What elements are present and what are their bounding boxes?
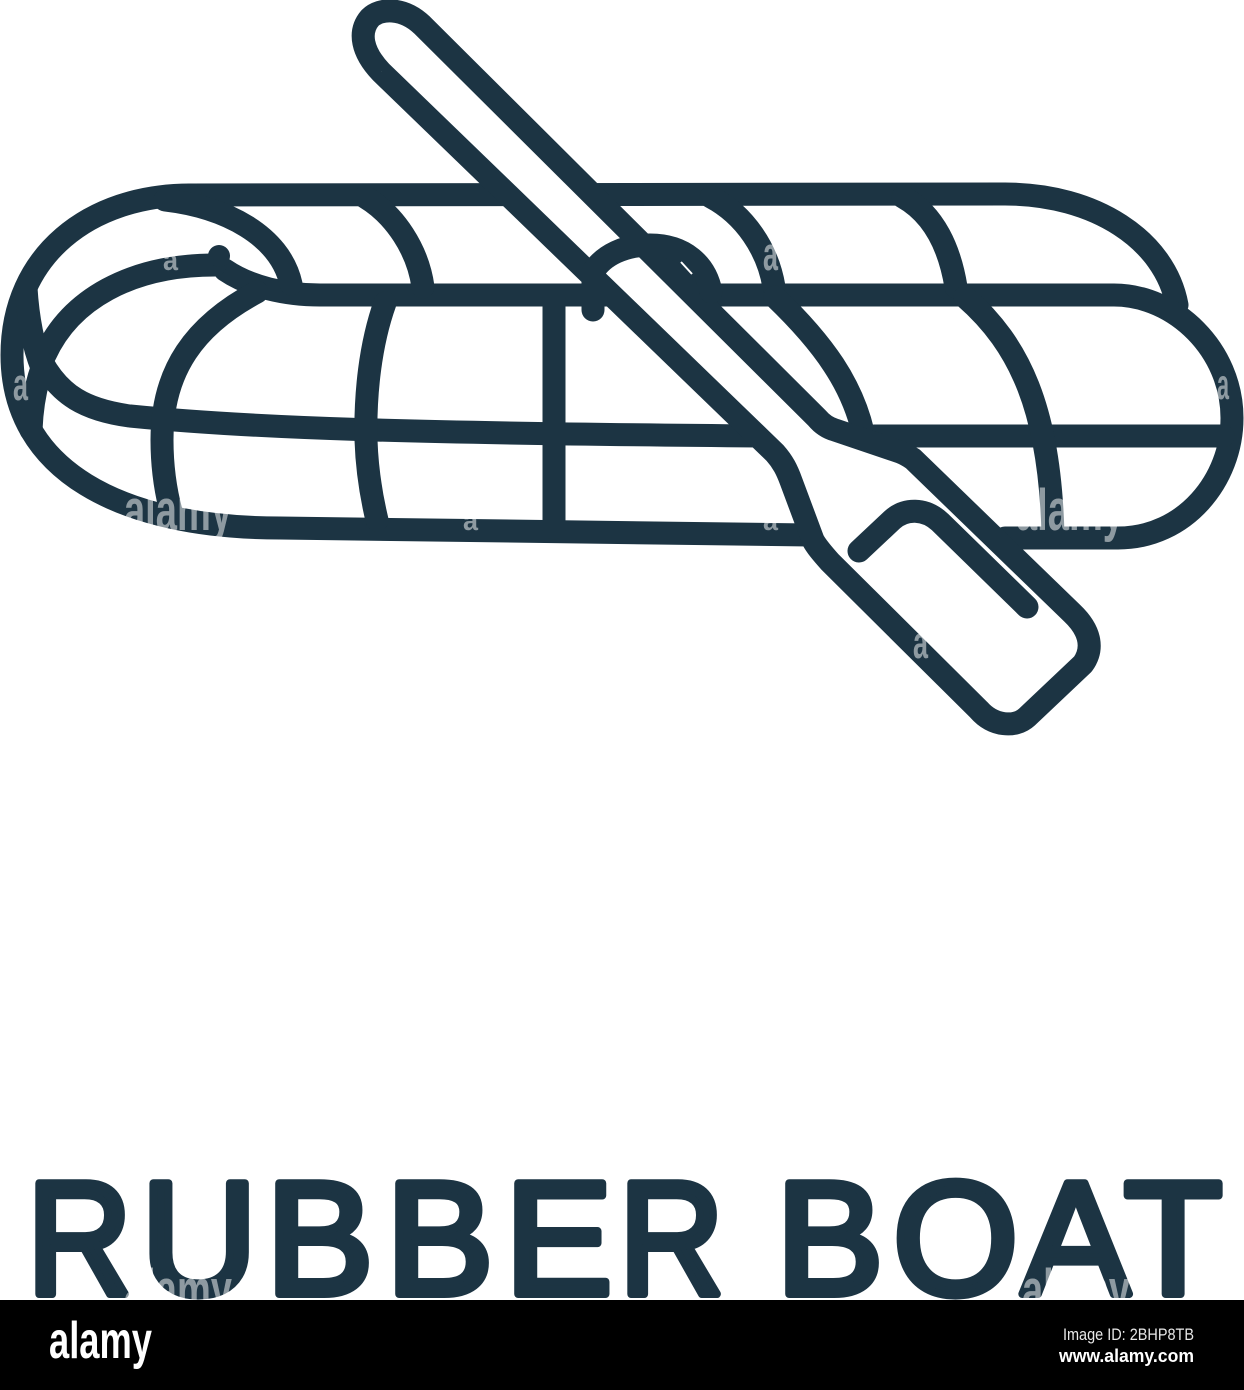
boat hull outline and tubes — [12, 194, 1232, 538]
tube seams — [162, 292, 257, 515]
title: A — [1022, 1149, 1130, 1329]
watermark marks over icon: alamy — [124, 478, 232, 543]
oar — [363, 11, 1089, 724]
watermark marks over icon — [13, 227, 1230, 668]
watermark marks over icon: a — [463, 505, 478, 536]
title: U — [141, 1149, 257, 1329]
watermark marks over title: a — [463, 1285, 478, 1316]
title: B — [776, 1149, 883, 1329]
title: B — [266, 1149, 373, 1329]
watermark marks over icon: a — [13, 359, 29, 410]
watermark marks over title: alamy — [124, 1258, 232, 1323]
title: E — [505, 1149, 612, 1329]
watermark marks over icon: a — [1217, 361, 1230, 409]
website: www.alamy.com — [1058, 1346, 1194, 1366]
watermark marks over icon: a — [163, 244, 178, 277]
footer logo: alamy — [49, 1312, 152, 1370]
watermark marks over icon: alamy — [1016, 478, 1124, 543]
title: B — [386, 1149, 493, 1329]
title: O — [893, 1149, 1018, 1329]
icon: rubber boat with oar — [12, 11, 1232, 724]
title: R — [27, 1149, 132, 1329]
oar blade inner line — [859, 511, 1027, 607]
watermark marks over title — [124, 1258, 1130, 1323]
watermark marks over title: alamy — [1022, 1258, 1130, 1323]
title: R — [619, 1149, 724, 1329]
watermark marks over icon: a — [763, 505, 778, 536]
title: T — [1124, 1149, 1222, 1329]
watermark marks over icon: a — [913, 617, 929, 668]
image id: Image ID: 2BHP8TB — [1063, 1325, 1194, 1344]
footer bar — [0, 1300, 1244, 1390]
oarlock — [593, 245, 711, 310]
watermark marks over icon: a — [763, 227, 778, 280]
